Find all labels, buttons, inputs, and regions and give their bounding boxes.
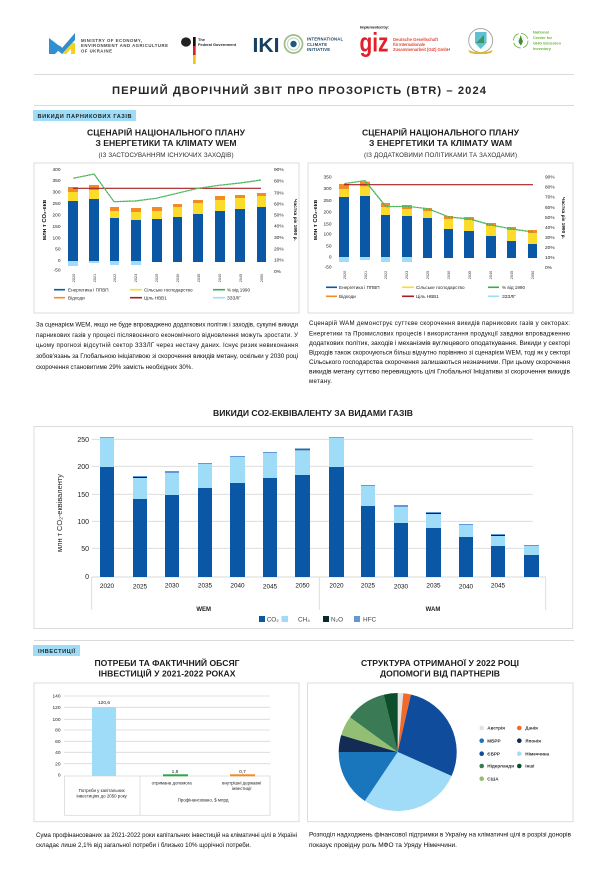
y axis: 250 (77, 437, 89, 444)
pie chart (339, 693, 457, 811)
logo: IKI (252, 34, 343, 57)
panel: WAM chart: 350 (323, 174, 332, 180)
legend: Сільське господарство (416, 285, 465, 290)
heading: WEM: (ІЗ ЗАСТОСУВАННЯМ ІСНУЮЧИХ ЗАХОДІВ) (98, 152, 234, 159)
text block: WAM: Сільського господарства скорочення залишаються незначними. При цьому скорочення (309, 359, 570, 366)
logo: IKI: INTERNATIONAL (307, 36, 343, 42)
panel: WEM chart: 350 (52, 178, 61, 184)
legend: США (487, 776, 499, 781)
x axis labels: 2040 (459, 584, 474, 590)
bars: CH4 (100, 438, 539, 555)
header logos (49, 24, 562, 64)
logo: ministry (49, 33, 168, 54)
logo: giz: Zusammenarbeit (GIZ) GmbH (393, 47, 450, 52)
panel: WEM chart (34, 163, 299, 313)
x axis labels: 2035 (426, 582, 441, 590)
panel: WEM chart: 250 (52, 201, 61, 207)
logo: IKI: INITIATIVE (307, 47, 330, 52)
heading: WEM: СЦЕНАРІЙ НАЦІОНАЛЬНОГО ПЛАНУ (87, 126, 246, 138)
text block: donors (309, 832, 571, 849)
x axis labels: 2035 (197, 274, 201, 282)
panel: gases chart (34, 426, 573, 628)
legend: Німеччина (525, 751, 550, 756)
text block: WEM: парникових газів у процесі післявоєнного економічного відновлення можуть зростати. У (36, 332, 298, 339)
x axis labels: 2045 (510, 271, 514, 279)
panel: WAM chart: 50 (326, 243, 332, 249)
x axis labels: 2030 (447, 271, 451, 279)
text block: WAM: Енергетики та Промислових процесів і використання продукції завдяки впровадженню (309, 330, 570, 338)
legend (479, 726, 550, 781)
legend: Відходи (339, 294, 356, 299)
panel: investments chart: 140 (52, 694, 61, 700)
panel: WAM chart: млн т CO₂-екв (313, 199, 319, 240)
legend: Данія (525, 726, 538, 731)
heading: WAM: (ІЗ ДОДАТКОВИМИ ПОЛІТИКАМИ ТА ЗАХОДАМИ) (364, 152, 517, 159)
heading: donors (361, 658, 519, 678)
text block: donors: показує провідну роль МФО та Уряду Німеччини. (309, 842, 457, 849)
text block: investments (36, 832, 297, 849)
share line (73, 174, 261, 202)
y axis: 100 (77, 519, 89, 526)
logo: IKI: IKI (252, 34, 280, 57)
panel: WAM chart (308, 163, 573, 313)
panel: WEM chart: 60% (274, 201, 284, 207)
stacked bars (68, 185, 266, 266)
x axis labels: 2022 (113, 274, 117, 282)
x axis labels: 2022 (384, 271, 388, 279)
text block: WEM: скорочення становитиме 29% замість необхідних 30%. (36, 364, 193, 371)
logo: IKI: CLIMATE (307, 42, 327, 47)
bars: N2O (133, 449, 505, 536)
text block: WEM: цьому прогнозі відсутній сектор ЗЗЗЛГ через нестачу даних. Існує ризик невиконання (36, 342, 298, 349)
heading: investments: ПОТРЕБИ ТА ФАКТИЧНИЙ ОБСЯГ (94, 657, 240, 668)
panel: WAM chart: 0% (545, 265, 553, 271)
x axis labels (343, 271, 535, 279)
panel: investments chart: 80 (55, 728, 61, 734)
legend: Енергетика і ППВП (68, 287, 109, 292)
panel: WEM chart: 0 (58, 258, 61, 264)
panel: WEM chart: Частка рік 1990 р. (292, 199, 298, 241)
x axis labels: 2035 (198, 582, 213, 590)
x axis labels: 2021 (93, 274, 97, 282)
text block: WEM: За сценарієм WEM, якщо не буде впроваджено додаткових політик і заходів, сукупні викиди (36, 322, 298, 328)
panel: WAM chart: 300 (323, 186, 332, 192)
logo: national GHG centre (513, 29, 562, 51)
heading: donors: ДОПОМОГИ ВІД ПАРТНЕРІВ (380, 668, 500, 678)
legend: Сільське господарство (144, 287, 193, 292)
heading: investments (94, 657, 240, 678)
legend: Відходи (68, 295, 85, 300)
text block: WAM: Відходів також скорочуються більш відчутно порівняно зі сценарієм WEM, тоді як у секторі (309, 350, 570, 356)
panel: WAM chart: 70% (545, 195, 555, 201)
legend: Ціль НВВ1 (416, 294, 439, 299)
panel: WAM chart: 50% (545, 215, 555, 221)
panel: WEM chart: 150 (52, 224, 61, 230)
text block: investments: складає лише 2,1% від загальної потреби і близько 10% щорічної потреби. (36, 842, 251, 849)
logo: giz: Implemented by: (360, 24, 389, 30)
category labels: інвестиціях до 2050 року (77, 794, 128, 798)
x axis labels: 2045 (263, 584, 278, 590)
legend (326, 285, 525, 299)
bars: CO2 (100, 467, 539, 577)
heading: WAM: З ЕНЕРГЕТИКИ ТА КЛІМАТУ WAM (369, 138, 512, 148)
x axis labels: 2050 (260, 274, 264, 282)
text block: WEM: зобов'язань за Глобальною ініціативою зі скорочення викидів метану, оскільки у 2030 році (36, 353, 298, 360)
legend: % від 1990 (227, 287, 250, 292)
legend: Ціль НВВ1 (144, 295, 167, 300)
panel: WEM chart: 50 (55, 247, 61, 253)
panel: WEM chart: 20% (274, 246, 284, 252)
legend: ЗЗЗЛГ (227, 295, 241, 300)
logo: federal government: The (198, 37, 206, 42)
x axis labels (72, 274, 264, 282)
x axis labels (100, 582, 506, 590)
section label: emissions: ВИКИДИ ПАРНИКОВИХ ГАЗІВ (38, 114, 132, 120)
value labels: 1,8 (172, 769, 179, 775)
logo: giz: für Internationale (393, 42, 426, 47)
panel: WEM chart: млн т CO₂-екв (42, 199, 48, 240)
value labels (98, 700, 246, 775)
legend: N₂O (331, 617, 343, 624)
x axis labels: 2023 (134, 274, 138, 282)
heading: WEM (87, 126, 246, 159)
panel: gases chart: WAM (426, 607, 440, 613)
x axis labels: 2025 (426, 271, 430, 279)
x axis labels: 2023 (405, 271, 409, 279)
heading: investments: ІНВЕСТИЦІЙ У 2021-2022 РОКАХ (98, 668, 236, 678)
panel: WAM chart: Частка рік 1990 р. (560, 197, 566, 239)
panel: WEM chart: 100 (52, 236, 61, 242)
x axis labels: 2025 (361, 582, 376, 590)
legend: Японія (525, 738, 541, 743)
panel: gases chart: WEM (196, 607, 211, 613)
logo: ministry: OF UKRAINE (81, 48, 112, 53)
panel: WAM chart: 30% (545, 235, 555, 241)
panel: WEM chart: 90% (274, 167, 284, 173)
text block: donors: Розподіл надходжень фінансової підтримки в Україну на кліматичні цілі в розрізі донорів (309, 832, 571, 838)
x axis labels: 2021 (364, 271, 368, 279)
legend: CO₂ (267, 617, 279, 624)
stacked bars (339, 182, 537, 262)
panel: investments chart: 20 (55, 761, 61, 767)
panel: WEM chart: 80% (274, 178, 284, 184)
logo: national GHG centre: Center for (533, 35, 553, 40)
text block: WEM (36, 322, 298, 371)
panel: WEM chart: 30% (274, 235, 284, 241)
text block: WAM: викидів метану суттєво перевищують цілі Глобальної Ініціативи зі скорочення викидів (309, 368, 570, 376)
panel: WAM chart: 20% (545, 245, 555, 251)
x axis labels: 2025 (155, 274, 159, 282)
category labels: внутрішні державні (222, 780, 261, 786)
panel: investments chart (34, 683, 299, 822)
panel: WAM chart: 150 (323, 221, 332, 227)
panel: WEM chart: 0% (274, 269, 282, 275)
x axis labels: 2045 (491, 582, 506, 590)
panel: WEM chart: 400 (52, 167, 61, 173)
x axis labels: 2030 (165, 582, 180, 590)
section label: investments: ІНВЕСТИЦІЇ (38, 648, 75, 655)
x axis labels: 2020 (100, 583, 115, 590)
title: ПЕРШИЙ ДВОРІЧНИЙ ЗВІТ ПРО ПРОЗОРІСТЬ (BTR) – 2024 (112, 84, 487, 97)
x axis labels: 2040 (218, 274, 222, 282)
legend (259, 616, 377, 624)
y axis: 150 (77, 492, 89, 499)
legend: Інші (525, 764, 534, 769)
category labels: Профінансовано, $ млрд (178, 798, 229, 803)
panel: WEM chart: 10% (274, 258, 284, 264)
panel: WAM chart: 90% (545, 174, 555, 180)
heading: WEM: З ЕНЕРГЕТИКИ ТА КЛІМАТУ WEM (96, 138, 236, 148)
text block: WAM: Сценарій WAM демонструє суттєве скорочення викидів парникових газів у секторах: (309, 320, 570, 327)
x axis labels: 2040 (489, 271, 493, 279)
legend: МБРР (487, 738, 501, 743)
section label: emissions (33, 110, 136, 121)
heading: WAM: СЦЕНАРІЙ НАЦІОНАЛЬНОГО ПЛАНУ (362, 126, 520, 138)
legend (54, 287, 250, 300)
logo: national GHG centre: Inventory (533, 46, 552, 51)
legend: CH₄ (298, 617, 310, 624)
logo: national GHG centre: National (533, 29, 549, 34)
value labels: 120,6 (98, 700, 110, 706)
panel: WEM chart: 40% (274, 224, 284, 230)
logo: emblem (468, 28, 493, 54)
category labels (77, 780, 261, 803)
logo: ministry: ENVIRONMENT AND AGRICULTURE (81, 43, 168, 48)
x axis labels: 2025 (133, 584, 148, 590)
section label: investments (33, 645, 80, 656)
heading: gases chart: ВИКИДИ CO2-ЕКВІВАЛЕНТУ ЗА ВИДАМИ ГАЗІВ (213, 408, 413, 418)
logo: giz: Deutsche Gesellschaft (393, 37, 439, 42)
legend: Енергетика і ППВП (339, 285, 380, 290)
logo: giz: giz (360, 28, 388, 58)
legend: ЄБРР (487, 751, 500, 756)
y axis: 0 (85, 574, 89, 581)
heading: WAM (362, 126, 520, 159)
category labels: отримана допомога (152, 780, 192, 786)
y axis: 50 (81, 546, 89, 553)
y axis: 200 (77, 464, 89, 471)
logo: ministry: MINISTRY OF ECONOMY, (81, 38, 142, 43)
legend: ЗЗЗЛГ (502, 294, 516, 299)
text block: WAM: додаткових політик, заходів і механізмів вуглецевого оподаткування. Викиди у секторі (309, 340, 570, 347)
panel: WAM chart: 40% (545, 225, 555, 231)
value labels: 0,7 (239, 769, 246, 775)
panel: WEM chart: -50 (54, 267, 61, 273)
bars (92, 707, 255, 776)
panel: WAM chart: 250 (323, 198, 332, 204)
heading: donors: СТРУКТУРА ОТРИМАНОЇ У 2022 РОЦІ (361, 658, 519, 668)
logo: federal government (181, 37, 237, 64)
panel: WAM chart: -50 (325, 264, 332, 270)
legend: Австрія (487, 726, 505, 731)
share line (344, 181, 533, 232)
x axis labels: 2040 (230, 582, 245, 590)
x axis labels: 2050 (531, 271, 535, 279)
text block: WAM (309, 320, 570, 385)
panel: WAM chart: 80% (545, 184, 555, 190)
panel: investments chart: 40 (55, 750, 61, 756)
logo: federal government: Federal Government (198, 42, 237, 47)
text block: WAM: метану. (309, 378, 332, 385)
x axis labels: 2045 (239, 274, 243, 282)
panel: investments chart: 120 (52, 705, 61, 711)
panel: WEM chart: 50% (274, 212, 284, 218)
bars: HFC (100, 437, 539, 546)
legend: Нідерланди (487, 764, 514, 769)
x axis labels: 2020 (72, 274, 76, 282)
logo: giz (360, 24, 450, 58)
target line (344, 184, 533, 186)
target line (73, 187, 261, 189)
x axis labels: 2020 (329, 582, 344, 590)
panel: WAM chart: 60% (545, 205, 555, 211)
category labels: Потреби у капітальних (79, 788, 126, 793)
x axis labels: 2030 (394, 584, 409, 590)
panel: gases chart: млн т CO₂-еквіваленту (55, 474, 64, 552)
x axis labels: 2020 (343, 271, 347, 279)
panel: investments chart: 0 (58, 772, 61, 778)
panel: WEM chart: 200 (52, 213, 61, 219)
logo: national GHG centre: GHG Emission (533, 40, 562, 46)
x axis labels: 2035 (468, 271, 472, 279)
panel: investments chart: 60 (55, 739, 61, 745)
category labels: інвестиції (232, 786, 252, 791)
panel: WAM chart: 10% (545, 255, 555, 261)
panel: WEM chart: 70% (274, 190, 284, 196)
x axis labels: 2050 (295, 582, 310, 590)
panel: WAM chart: 0 (329, 255, 332, 261)
text block: investments: Сума профінансованих за 2021-2022 роки капітальних інвестицій на кліматичні цілі в Україні (36, 832, 297, 839)
panel: WAM chart: 100 (323, 232, 332, 238)
panel: WAM chart: 200 (323, 210, 332, 216)
y axis (77, 437, 89, 581)
panel: donors pie (308, 683, 573, 822)
panel: WEM chart: 300 (52, 189, 61, 195)
x axis labels: 2030 (176, 274, 180, 282)
legend: % від 1990 (502, 285, 525, 290)
legend: HFC (363, 617, 377, 624)
panel: investments chart: 100 (52, 717, 61, 723)
